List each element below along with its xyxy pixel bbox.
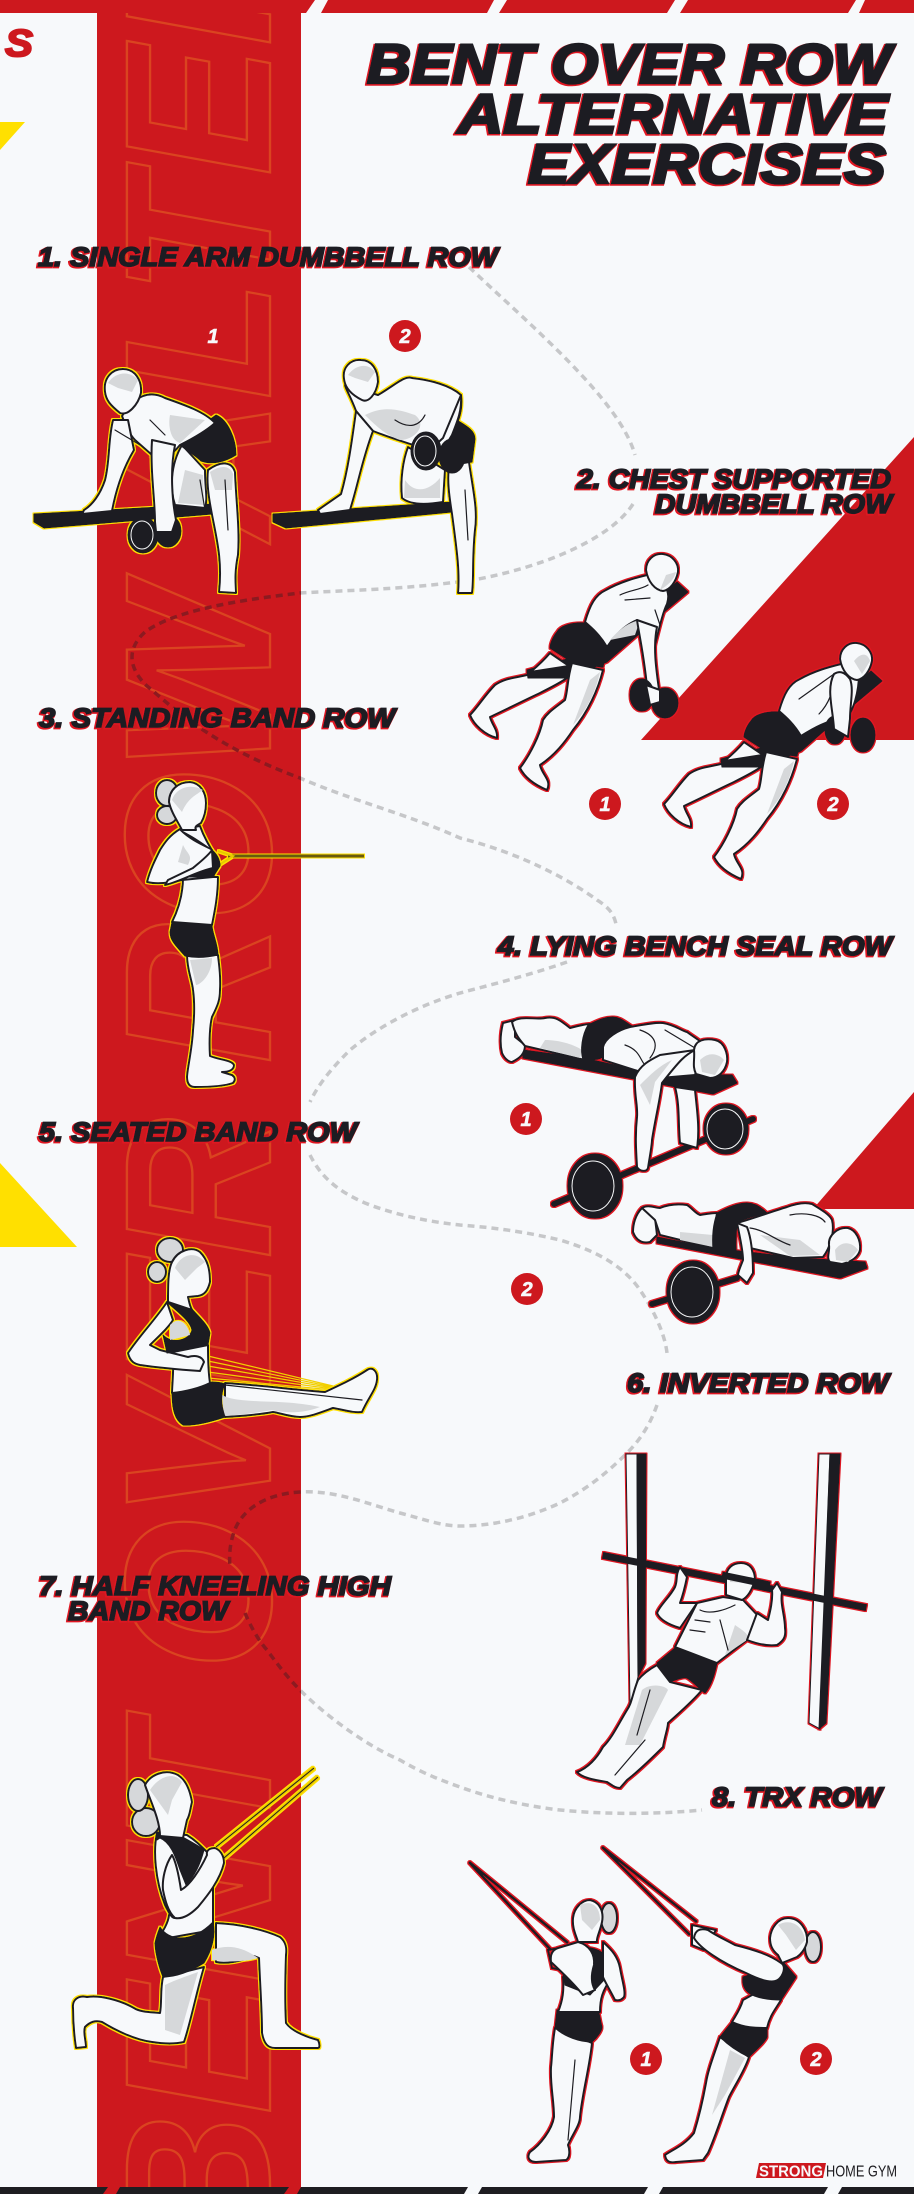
brand logo: HOME GYM bbox=[826, 2164, 897, 2180]
step number 1 (exercise 4) bbox=[510, 1103, 542, 1135]
figure: TRX row position 2 bbox=[602, 1847, 821, 2162]
step number 2 (exercise 4): 2 bbox=[520, 1279, 533, 1301]
red triangle lower right bbox=[813, 1092, 914, 1209]
step number 2 (exercise 2): 2 bbox=[826, 794, 839, 816]
heading 7: 7. HALF KNEELING HIGH bbox=[39, 1571, 392, 1601]
figure: chest supported row position 2 bbox=[664, 643, 882, 879]
figure: lying seal row position 1 bbox=[501, 1017, 753, 1218]
step number 2 (exercise 8): 2 bbox=[809, 2049, 822, 2071]
step number 1 (exercise 2): 1 bbox=[599, 794, 611, 816]
step number 2 (exercise 8) bbox=[800, 2043, 832, 2075]
step number 1 (exercise 8): 1 bbox=[640, 2049, 652, 2071]
heading 4: 4. LYING BENCH SEAL ROW bbox=[497, 931, 895, 961]
red triangle upper right bbox=[641, 437, 914, 740]
heading 7 bbox=[39, 1571, 392, 1626]
figure: TRX row position 1 bbox=[469, 1862, 625, 2162]
step number 1 (exercise 2) bbox=[589, 788, 621, 820]
heading 6: 6. INVERTED ROW bbox=[627, 1368, 892, 1398]
step number 2 (exercise 1): 2 bbox=[398, 326, 411, 348]
figure: standing band row bbox=[147, 780, 364, 1087]
figure: single arm row position 2 bbox=[273, 360, 476, 593]
title bbox=[367, 32, 896, 195]
brand logo: STRONG bbox=[759, 2164, 823, 2180]
heading 8: 8. TRX ROW bbox=[712, 1782, 885, 1812]
step number 1 (exercise 1) bbox=[197, 320, 229, 352]
title: EXERCISES bbox=[528, 132, 886, 195]
step number 2 (exercise 4) bbox=[511, 1273, 543, 1305]
step number 2 (exercise 2) bbox=[817, 788, 849, 820]
resistance bands: seated row bbox=[208, 1356, 333, 1390]
brand logo bbox=[756, 2163, 897, 2180]
heading 2: DUMBBELL ROW bbox=[655, 489, 895, 519]
figure: seated band row bbox=[128, 1238, 377, 1425]
title: ALTERNATIVE bbox=[456, 82, 890, 145]
step number 1 (exercise 4): 1 bbox=[520, 1109, 532, 1131]
yellow triangle top left bbox=[0, 122, 25, 150]
heading 2: 2. CHEST SUPPORTED bbox=[576, 464, 891, 494]
dotted connector path bbox=[132, 267, 702, 1813]
heading 7: BAND ROW bbox=[68, 1596, 231, 1626]
step number 2 (exercise 1) bbox=[389, 320, 421, 352]
heading 5: 5. SEATED BAND ROW bbox=[39, 1117, 360, 1147]
step number 1 (exercise 1): 1 bbox=[207, 326, 219, 348]
step number 1 (exercise 8) bbox=[630, 2043, 662, 2075]
figure: inverted row bbox=[577, 1454, 863, 1788]
bottom stripe bbox=[0, 2187, 914, 2194]
figure: lying seal row position 2 bbox=[633, 1203, 867, 1323]
heading 1: 1. SINGLE ARM DUMBBELL ROW bbox=[38, 242, 501, 272]
figure: half kneeling band row bbox=[73, 1768, 320, 2048]
figure: single arm row position 1 bbox=[34, 369, 239, 593]
figure: chest supported row position 1 bbox=[470, 554, 688, 790]
heading 2 bbox=[576, 464, 895, 519]
yellow triangle lower left bbox=[0, 1163, 77, 1247]
top stripe bbox=[0, 0, 914, 13]
title: BENT OVER ROW bbox=[367, 32, 896, 95]
heading 3: 3. STANDING BAND ROW bbox=[39, 703, 398, 733]
panel: red vertical strip bbox=[97, 0, 301, 2194]
logo S: S bbox=[5, 23, 33, 65]
